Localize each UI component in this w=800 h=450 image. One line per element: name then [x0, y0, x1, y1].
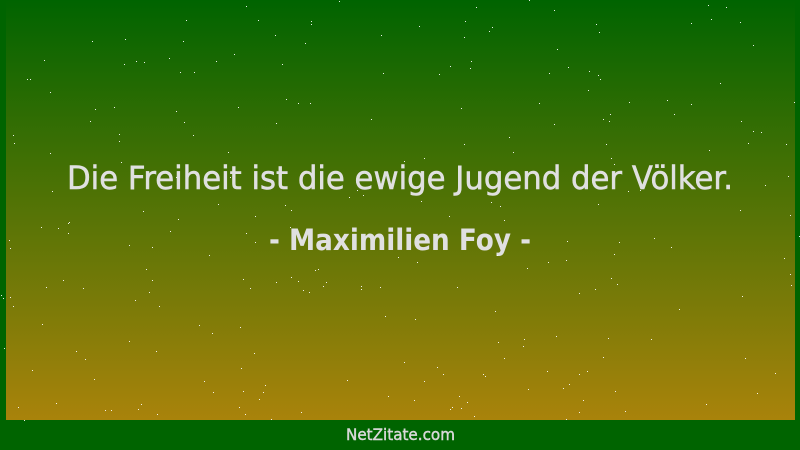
- footer site name: NetZitate.com: [346, 425, 455, 444]
- author name: - Maximilien Foy -: [269, 223, 531, 257]
- quote text: Die Freiheit ist die ewige Jugend der Völker.: [67, 159, 733, 197]
